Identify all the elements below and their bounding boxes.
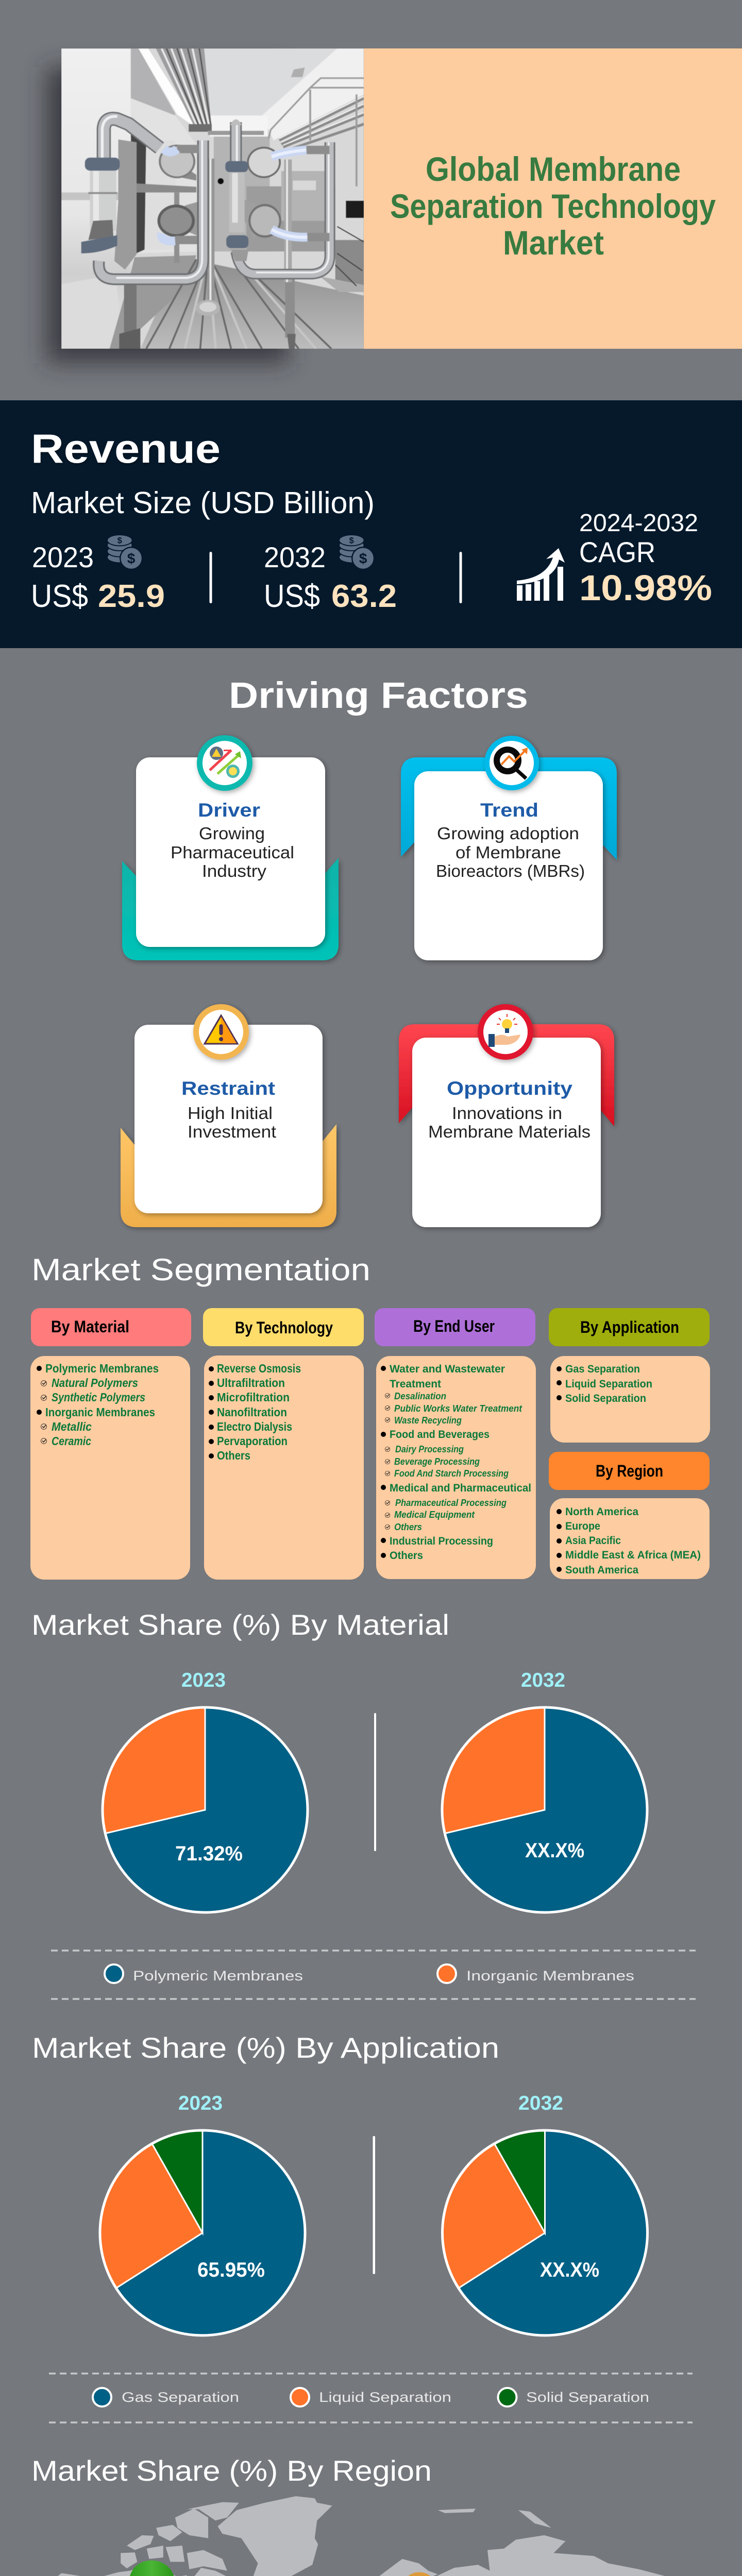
application list: Gas Separation [565, 1363, 640, 1375]
trend text: Bioreactors (MBRs) [436, 861, 585, 880]
icon: coins 2023 [107, 535, 142, 569]
segment: by region [549, 1452, 710, 1579]
2023 revenue: 2023 [32, 541, 94, 573]
heading: market segmentation: Market Segmentation [31, 1252, 370, 1287]
end user list: Beverage Processing [394, 1456, 480, 1467]
opportunity text [428, 1104, 591, 1141]
CAGR: 10.98% [579, 568, 712, 608]
heading: market share by application: Market Share (%) By Application [32, 2031, 499, 2064]
trend heading: Trend [480, 800, 538, 821]
end user list: Waste Recycling [394, 1415, 462, 1426]
segment: by end user: By End User [413, 1317, 495, 1335]
revenue band [0, 400, 742, 648]
material list: Metallic [52, 1420, 92, 1433]
legend: application: Liquid Separation [319, 2389, 451, 2405]
hero title [390, 150, 716, 262]
region list: Europe [565, 1520, 600, 1532]
flanged membrane housings [182, 171, 197, 181]
2032 revenue: 2032 [264, 541, 326, 573]
end user list: Industrial Processing [390, 1535, 493, 1547]
2032 revenue: 63.2 [331, 579, 397, 614]
pipe: column [208, 159, 214, 306]
restraint text [188, 1104, 276, 1141]
hero title: Global Membrane [426, 150, 681, 188]
pie chart: application 2023: 65.95% [197, 2259, 265, 2281]
north america [45, 2566, 256, 2576]
material list: Ceramic [52, 1434, 91, 1448]
card: opportunity [399, 1004, 614, 1227]
eurasia [337, 2535, 709, 2576]
2032 revenue [264, 535, 397, 614]
hero banner [46, 48, 742, 363]
pie chart: material 2032 [442, 1669, 647, 1912]
segment: by application [549, 1308, 710, 1443]
sight glasses [90, 170, 116, 231]
CAGR: CAGR [579, 536, 655, 568]
region list: South America [565, 1564, 638, 1576]
technology list: Others [217, 1449, 250, 1462]
revenue heading: Revenue [31, 426, 221, 471]
material list: Synthetic Polymers [52, 1391, 145, 1404]
pin: europe [404, 2572, 434, 2576]
pie chart: application 2032: XX.X% [540, 2259, 599, 2281]
opportunity text: Membrane Materials [428, 1122, 591, 1141]
end user list: Water and Wastewater [390, 1363, 505, 1375]
segment: by material: By Material [51, 1317, 129, 1336]
technology list: Ultrafiltration [217, 1376, 285, 1389]
legend: material: Polymeric Membranes [133, 1968, 303, 1984]
hero drop shadow [46, 67, 289, 363]
end user list [381, 1363, 531, 1562]
hero title panel [364, 48, 742, 349]
legend: application: Gas Separation [122, 2389, 239, 2405]
CAGR: 2024-2032 [579, 510, 698, 537]
trend text: of Membrane [456, 843, 561, 862]
application list: Liquid Separation [565, 1378, 652, 1390]
icon: coins 2032 [339, 535, 374, 569]
pie chart: material 2032: 2032 [521, 1669, 565, 1691]
end user list: Food and Beverages [390, 1429, 490, 1440]
application list: Solid Separation [565, 1393, 646, 1404]
technology list: Pervaporation [217, 1434, 288, 1448]
icon: growth chart arrow [517, 548, 565, 601]
driver text [171, 824, 294, 880]
hero photo: membrane filtration piping [61, 48, 364, 349]
legend: material: Inorganic Membranes [466, 1968, 634, 1984]
pie chart: application 2023 [100, 2092, 305, 2335]
material list: Inorganic Membranes [45, 1405, 155, 1419]
segment: by region: By Region [596, 1462, 663, 1480]
driver heading: Driver [198, 800, 260, 821]
technology list: Electro Dialysis [217, 1420, 292, 1433]
legend: application: Solid Separation [526, 2389, 649, 2405]
market size label: Market Size (USD Billion) [31, 486, 375, 520]
driver text: Industry [202, 861, 267, 880]
restraint text: High Initial [188, 1104, 273, 1123]
technology list: Nanofiltration [217, 1405, 287, 1419]
legend: application [93, 2388, 649, 2406]
pipe: right U [236, 142, 330, 274]
region list: Middle East & Africa (MEA) [565, 1549, 701, 1561]
islands of europe and asia [331, 2509, 664, 2576]
region list [556, 1506, 701, 1576]
pie chart: material 2023 [103, 1669, 308, 1912]
legend: material [105, 1964, 634, 1984]
pipe: center riser [230, 122, 242, 162]
pie chart: application 2023: 2023 [178, 2092, 223, 2114]
icon: warning triangle [193, 1004, 249, 1060]
frame [114, 140, 137, 269]
application list [556, 1363, 652, 1404]
pie chart: material 2023: 71.32% [175, 1842, 243, 1865]
heading: market share by material: Market Share (%) By Material [31, 1608, 449, 1641]
icon: trend magnifier [484, 736, 539, 790]
segment: by application: By Application [580, 1318, 679, 1336]
end user list: Food And Starch Processing [394, 1468, 509, 1479]
CAGR [579, 510, 712, 608]
technology list: Microfiltration [217, 1391, 290, 1404]
heading: driving factors: Driving Factors [229, 675, 528, 716]
scandinavia [364, 2559, 438, 2576]
heading: market share by region: Market Share (%) By Region [31, 2454, 432, 2487]
2023 revenue: 25.9 [98, 579, 165, 614]
driver text: Pharmaceutical [171, 843, 294, 862]
technology list [209, 1362, 301, 1462]
restraint heading: Restraint [181, 1078, 275, 1099]
greenland [217, 2496, 332, 2576]
driver text: Growing [199, 824, 265, 843]
icon: driver arrows [197, 735, 252, 791]
end user list: Medical and Pharmaceutical [390, 1482, 531, 1494]
end user list: Medical Equipment [394, 1510, 475, 1520]
hero title: Market [503, 224, 604, 262]
region list: North America [565, 1506, 638, 1518]
segment: by material [30, 1308, 191, 1580]
restraint text: Investment [188, 1122, 276, 1141]
material list [37, 1362, 159, 1448]
trend text: Growing adoption [437, 824, 579, 843]
pie chart: material 2032: XX.X% [525, 1839, 584, 1862]
2023 revenue [31, 535, 165, 614]
pie chart: material 2023: 2023 [181, 1669, 226, 1691]
end user list: Public Works Water Treatment [394, 1403, 522, 1414]
end user list: Others [394, 1522, 422, 1532]
2032 revenue: US$ [264, 579, 320, 614]
segment: by technology: By Technology [235, 1318, 333, 1337]
2023 revenue: US$ [31, 579, 88, 614]
segment: by end user [375, 1308, 536, 1579]
region list: Asia Pacific [565, 1535, 621, 1547]
pipe: left elbow [104, 119, 160, 159]
end user list: Pharmaceutical Processing [395, 1498, 507, 1508]
right equipment [281, 171, 325, 221]
pie chart: application 2032 [442, 2092, 647, 2335]
segment: by technology [203, 1308, 364, 1580]
card: driver [122, 735, 339, 960]
hose connectors [175, 149, 329, 240]
pie chart: application 2032: 2032 [518, 2092, 563, 2114]
end user list: Others [390, 1550, 423, 1562]
pipe: left U [99, 140, 203, 279]
material list: Polymeric Membranes [45, 1362, 159, 1375]
card: trend [401, 736, 617, 960]
world map [45, 2496, 709, 2576]
trend text [436, 824, 585, 880]
opportunity text: Innovations in [452, 1104, 562, 1123]
pin: north america [129, 2561, 175, 2576]
opportunity heading: Opportunity [447, 1078, 572, 1099]
material list: Natural Polymers [52, 1376, 138, 1389]
card: restraint [121, 1004, 336, 1227]
arctic islands [121, 2502, 239, 2571]
end user list: Treatment [390, 1378, 441, 1390]
icon: hand and light bulb [478, 1004, 533, 1060]
end user list: Desalination [394, 1391, 446, 1401]
technology list: Reverse Osmosis [217, 1362, 301, 1375]
end user list: Dairy Processing [395, 1444, 464, 1454]
